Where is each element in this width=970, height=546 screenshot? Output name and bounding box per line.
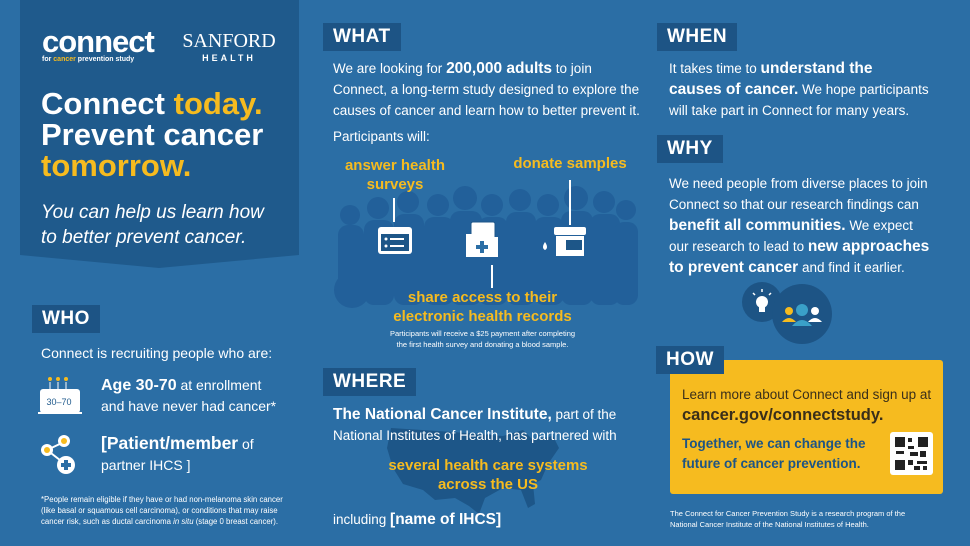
heading: WHEN xyxy=(657,23,737,51)
heading: WHY xyxy=(657,135,723,163)
text: learn more xyxy=(682,387,932,424)
text: patient: partner IHCS ] xyxy=(101,457,190,473)
text: when: It takes time to understand the xyxy=(669,60,872,77)
heading: HOW xyxy=(656,346,724,374)
title: tomorrow. xyxy=(41,148,191,183)
title: Prevent cancer xyxy=(41,117,263,152)
logo: connect: connect xyxy=(42,24,154,59)
text: including: including [name of IHCS] xyxy=(333,511,501,528)
heading: WHAT: WHAT xyxy=(333,26,391,47)
text: patient: [Patient/member of xyxy=(101,433,254,453)
text: why: benefit all communities. We expect xyxy=(669,217,913,234)
title: Connect today. xyxy=(41,86,263,121)
label: surveys: surveys xyxy=(367,176,423,193)
footnote: (like basal or squamous cell carcinoma), or conditions that may raise xyxy=(41,506,278,515)
icon: cake: 30–70 xyxy=(46,397,72,407)
text: health systems: several health care systems xyxy=(388,457,588,474)
icon: cake xyxy=(38,377,82,414)
logo: Sanford Health: HEALTH xyxy=(202,53,256,63)
text: health systems: across the US xyxy=(438,476,538,493)
heading: WHO xyxy=(32,305,100,333)
icon: QR code xyxy=(890,432,933,475)
text: together: Together, we can change the xyxy=(682,436,866,451)
note: payment: Participants will receive a $25 payment after completing xyxy=(390,329,575,338)
label: records xyxy=(393,289,572,325)
footnote xyxy=(41,495,283,526)
subtitle: You can help us learn how xyxy=(41,202,264,223)
text: when: will take part in Connect for many years. xyxy=(669,103,909,118)
footer note xyxy=(670,509,905,529)
text: when xyxy=(669,60,929,118)
note: payment xyxy=(390,329,575,349)
text: learn more: cancer.gov/connectstudy. xyxy=(682,406,883,424)
panel: HOW xyxy=(670,360,943,494)
text: why xyxy=(669,176,929,276)
logo: Sanford Health: SANFORD xyxy=(182,30,276,52)
text: age: Age 30-70 at enrollment xyxy=(101,377,261,394)
chart: crowd silhouette with activities xyxy=(334,155,638,349)
title xyxy=(41,86,263,183)
text: why: We need people from diverse places to join xyxy=(669,176,928,191)
heading: WHEN: WHEN xyxy=(667,26,727,47)
heading: WHO: WHO xyxy=(42,308,90,329)
text: why: to prevent cancer and find it earlier. xyxy=(669,259,905,276)
text: who intro: Connect is recruiting people who are: xyxy=(41,345,272,361)
map: US xyxy=(387,428,559,514)
label: surveys: answer health xyxy=(345,157,445,174)
label: records: electronic health records xyxy=(393,308,572,325)
footer note: National Cancer Institute of the National Institutes of Health. xyxy=(670,520,869,529)
heading: WHY: WHY xyxy=(667,138,713,159)
text: together xyxy=(682,436,866,471)
text: age xyxy=(101,377,276,414)
text: why: our research to lead to new approaches xyxy=(669,238,929,255)
label: records: share access to their xyxy=(408,289,557,306)
footnote: *People remain eligible if they have or had non-melanoma skin cancer xyxy=(41,495,283,504)
panel: hero xyxy=(20,0,299,268)
heading: HOW: HOW xyxy=(666,349,714,370)
heading: WHAT xyxy=(323,23,401,51)
text: participants will: Participants will: xyxy=(333,129,430,144)
text: health systems xyxy=(388,457,588,493)
text: what: We are looking for 200,000 adults to join Connect, a long-term study designed to explore the causes of cancer and learn how to better prevent it. xyxy=(333,60,640,118)
label: samples: donate samples xyxy=(513,155,627,172)
subtitle: to better prevent cancer. xyxy=(41,227,246,248)
label: surveys xyxy=(345,157,445,193)
footer note: The Connect for Cancer Prevention Study is a research program of the xyxy=(670,509,905,518)
logo: Sanford Health xyxy=(182,30,276,63)
note: payment: the first health survey and donating a blood sample. xyxy=(397,340,568,349)
text: patient xyxy=(101,433,254,473)
text: together: future of cancer prevention. xyxy=(682,456,861,471)
logo: connect: for cancer prevention study xyxy=(42,56,134,63)
heading: WHERE: WHERE xyxy=(333,371,406,392)
icon: network xyxy=(41,435,75,474)
heading: WHERE xyxy=(323,368,416,396)
text: learn more: Learn more about Connect and sign up at xyxy=(682,387,931,402)
text: why: Connect so that our research findings can xyxy=(669,197,919,212)
subtitle xyxy=(41,202,265,248)
text: age: and have never had cancer* xyxy=(101,398,276,414)
icon: idea and community xyxy=(742,282,832,344)
text: where: The National Cancer Institute, part of the National Institutes of Health, has partnered with xyxy=(333,406,617,443)
footnote: cancer risk, such as ductal carcinoma in situ (stage 0 breast cancer). xyxy=(41,517,278,526)
text: when: causes of cancer. We hope participants xyxy=(669,81,929,98)
